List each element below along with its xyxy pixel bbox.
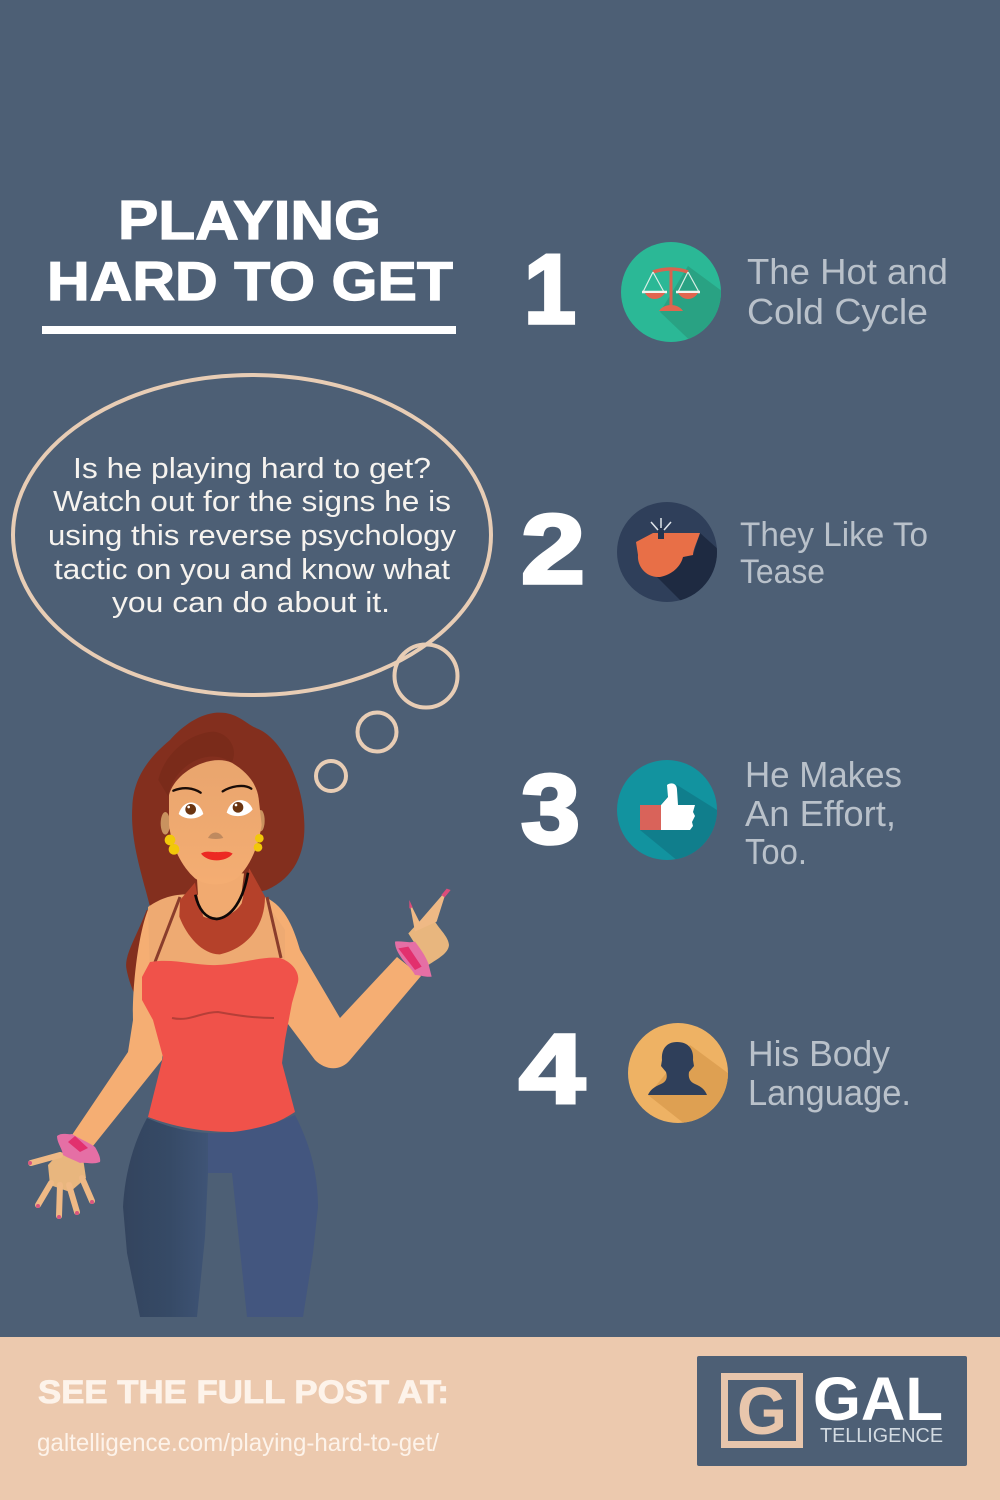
label (747, 251, 948, 332)
left scrunchie (57, 1134, 100, 1163)
title (42, 189, 456, 334)
eyebrows (173, 786, 251, 793)
number 2: 2 (521, 494, 585, 604)
thought bubble (13, 375, 491, 791)
thought bubble: Is he playing hard to get? (73, 453, 431, 485)
number 1: 1 (524, 234, 576, 344)
label: They Like To (740, 516, 928, 554)
logo (697, 1356, 967, 1466)
top seam (172, 1012, 274, 1019)
label: Language. (748, 1072, 911, 1113)
number 3: 3 (521, 754, 580, 864)
top (142, 958, 298, 1132)
thought bubble: Watch out for the signs he is (53, 486, 451, 518)
icon: person (628, 1023, 728, 1123)
icon: scales (621, 242, 721, 342)
number 4: 4 (519, 1014, 585, 1124)
label: His Body (748, 1033, 890, 1074)
straps (155, 897, 281, 962)
left hand (28, 1152, 94, 1219)
lips (201, 852, 233, 860)
title: PLAYING (118, 189, 381, 251)
label (748, 1033, 911, 1113)
scarf (179, 868, 265, 954)
left arm (72, 905, 170, 1146)
label (740, 516, 928, 591)
title: HARD TO GET (47, 250, 453, 312)
label (745, 754, 902, 872)
thought bubble: you can do about it. (112, 587, 390, 619)
chest (148, 894, 285, 975)
woman illustration (28, 713, 451, 1317)
earrings (165, 834, 264, 855)
right hand (408, 889, 451, 965)
nose (208, 832, 223, 839)
icon: thumbs up (617, 760, 717, 860)
neck and face (161, 760, 265, 917)
thought bubble: using this reverse psychology (48, 520, 457, 552)
footer heading: SEE THE FULL POST AT: (38, 1374, 449, 1410)
item 3 (521, 760, 901, 864)
thought bubble: tactic on you and know what (54, 554, 450, 586)
footer url: galtelligence.com/playing-hard-to-get/ (37, 1429, 439, 1457)
label: An Effort, (745, 793, 896, 834)
right scrunchie (395, 941, 432, 977)
item 1 (528, 242, 946, 342)
logo: GAL (813, 1365, 943, 1433)
icon: whistle (617, 502, 717, 602)
logo: TELLIGENCE (820, 1425, 943, 1447)
label: Cold Cycle (747, 291, 928, 332)
label: The Hot and (747, 251, 948, 292)
label: He Makes (745, 754, 902, 795)
footer (0, 1337, 1000, 1500)
jeans right (208, 1115, 318, 1317)
label: Tease (740, 553, 825, 591)
right arm (262, 896, 421, 1068)
item 4 (518, 1023, 908, 1123)
hair back (126, 713, 304, 1000)
eyes (179, 800, 253, 818)
item 2 (522, 502, 927, 602)
hair top strands (158, 732, 234, 797)
jeans left (123, 1118, 208, 1317)
logo: G (737, 1374, 787, 1449)
label: Too. (745, 831, 807, 872)
